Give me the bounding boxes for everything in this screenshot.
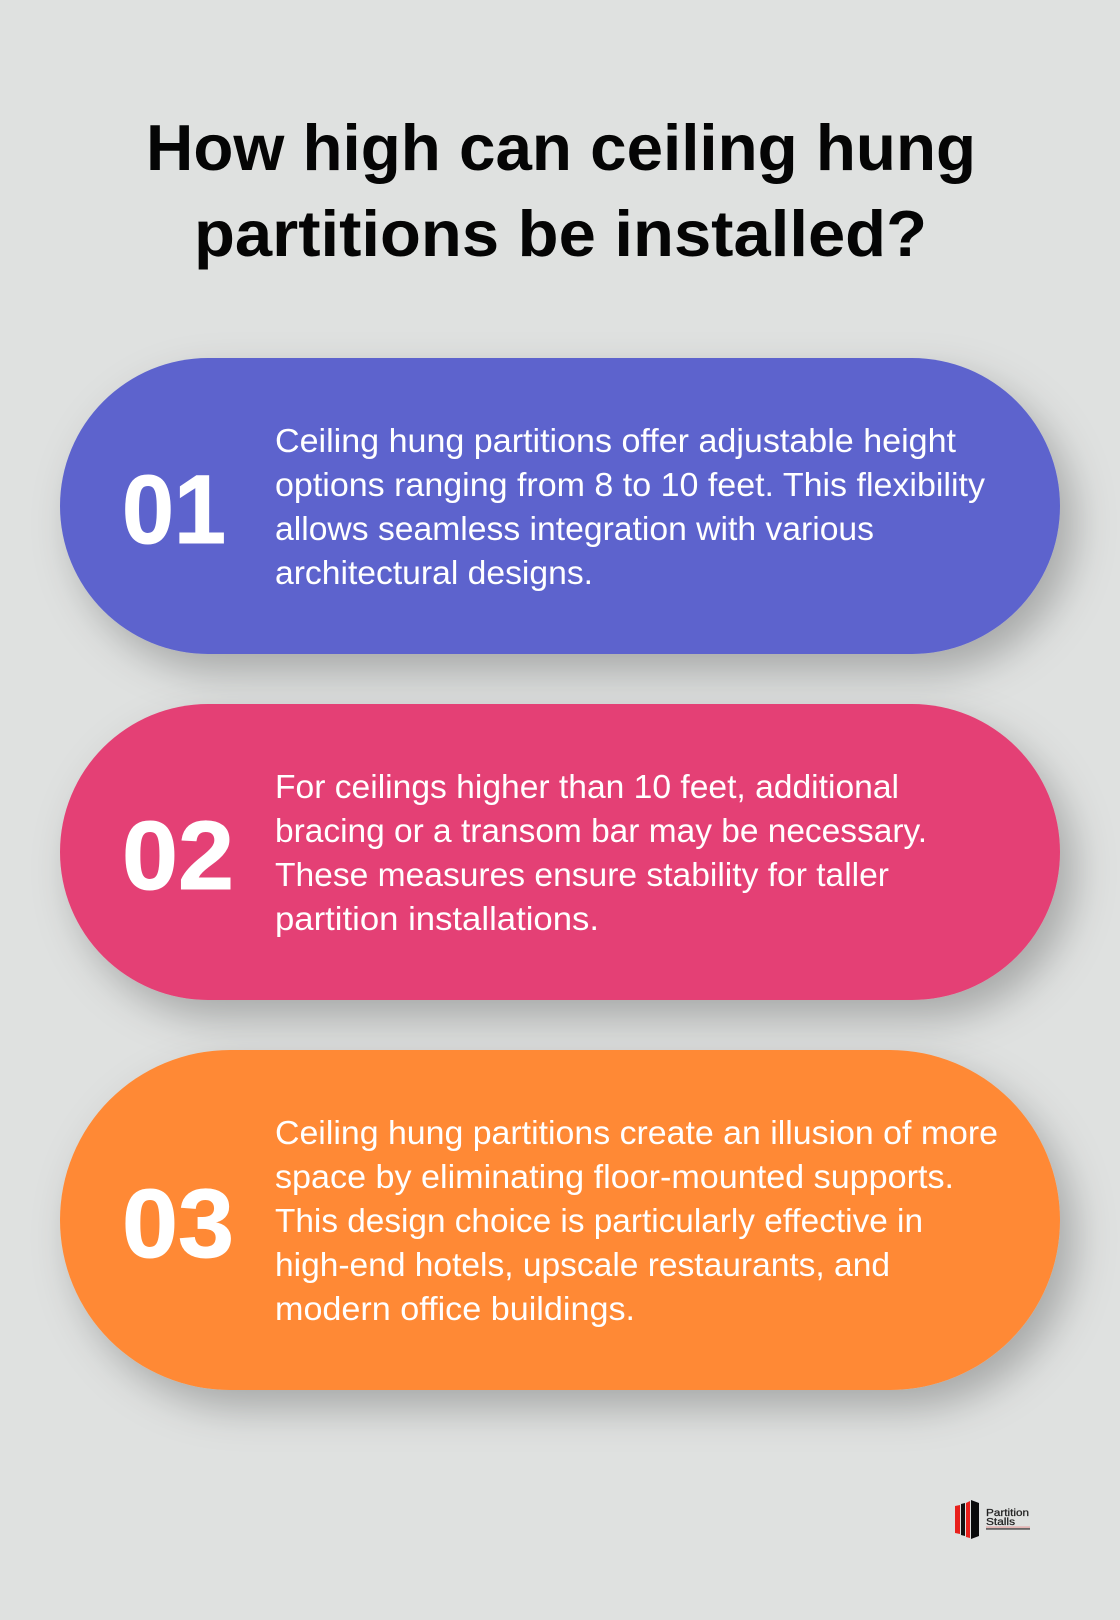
text block: step 03: high-end hotels, upscale restaurants, and [275,1246,890,1283]
text block: step 03: modern office buildings. [275,1290,635,1327]
panel: step 02 [60,704,1060,1000]
text block: step 01 [275,422,986,591]
text block: step 02: partition installations. [275,900,599,937]
text block: step 02: bracing or a transom bar may be necessary. [275,812,927,849]
panel: step 03 [60,1050,1060,1390]
number: 01: 01 [122,455,226,564]
card background: step 01 [60,358,1060,654]
logo wordmark [986,1508,1030,1530]
text block: step 03 [275,1114,998,1327]
text block: step 02: For ceilings higher than 10 feet, additional [275,768,899,805]
text block: step 01: architectural designs. [275,554,593,591]
text block: step 01: Ceiling hung partitions offer adjustable height [275,422,956,459]
card background: step 03 [60,1050,1060,1390]
card background: step 02 [60,704,1060,1000]
number: 02: 02 [122,801,234,910]
number: 03: 03 [122,1169,234,1278]
logo wordmark: Partition [986,1508,1029,1519]
text block: step 03: space by eliminating floor-mounted supports. [275,1158,954,1195]
text block: step 02: These measures ensure stability for taller [275,856,889,893]
text block: step 01: options ranging from 8 to 10 feet. This flexibility [275,466,986,503]
text block: step 02 [275,768,927,937]
icon: partition panels [955,1500,979,1539]
text block: step 01: allows seamless integration with various [275,510,874,547]
title [146,111,976,270]
text block: step 03: Ceiling hung partitions create an illusion of more [275,1114,998,1151]
panel: step 01 [60,358,1060,654]
logo: Partition Stalls [955,1500,1030,1539]
text block: step 03: This design choice is particularly effective in [275,1202,923,1239]
title: How high can ceiling hung [146,111,976,184]
logo wordmark: Stalls [986,1517,1015,1528]
title: partitions be installed? [194,197,927,270]
